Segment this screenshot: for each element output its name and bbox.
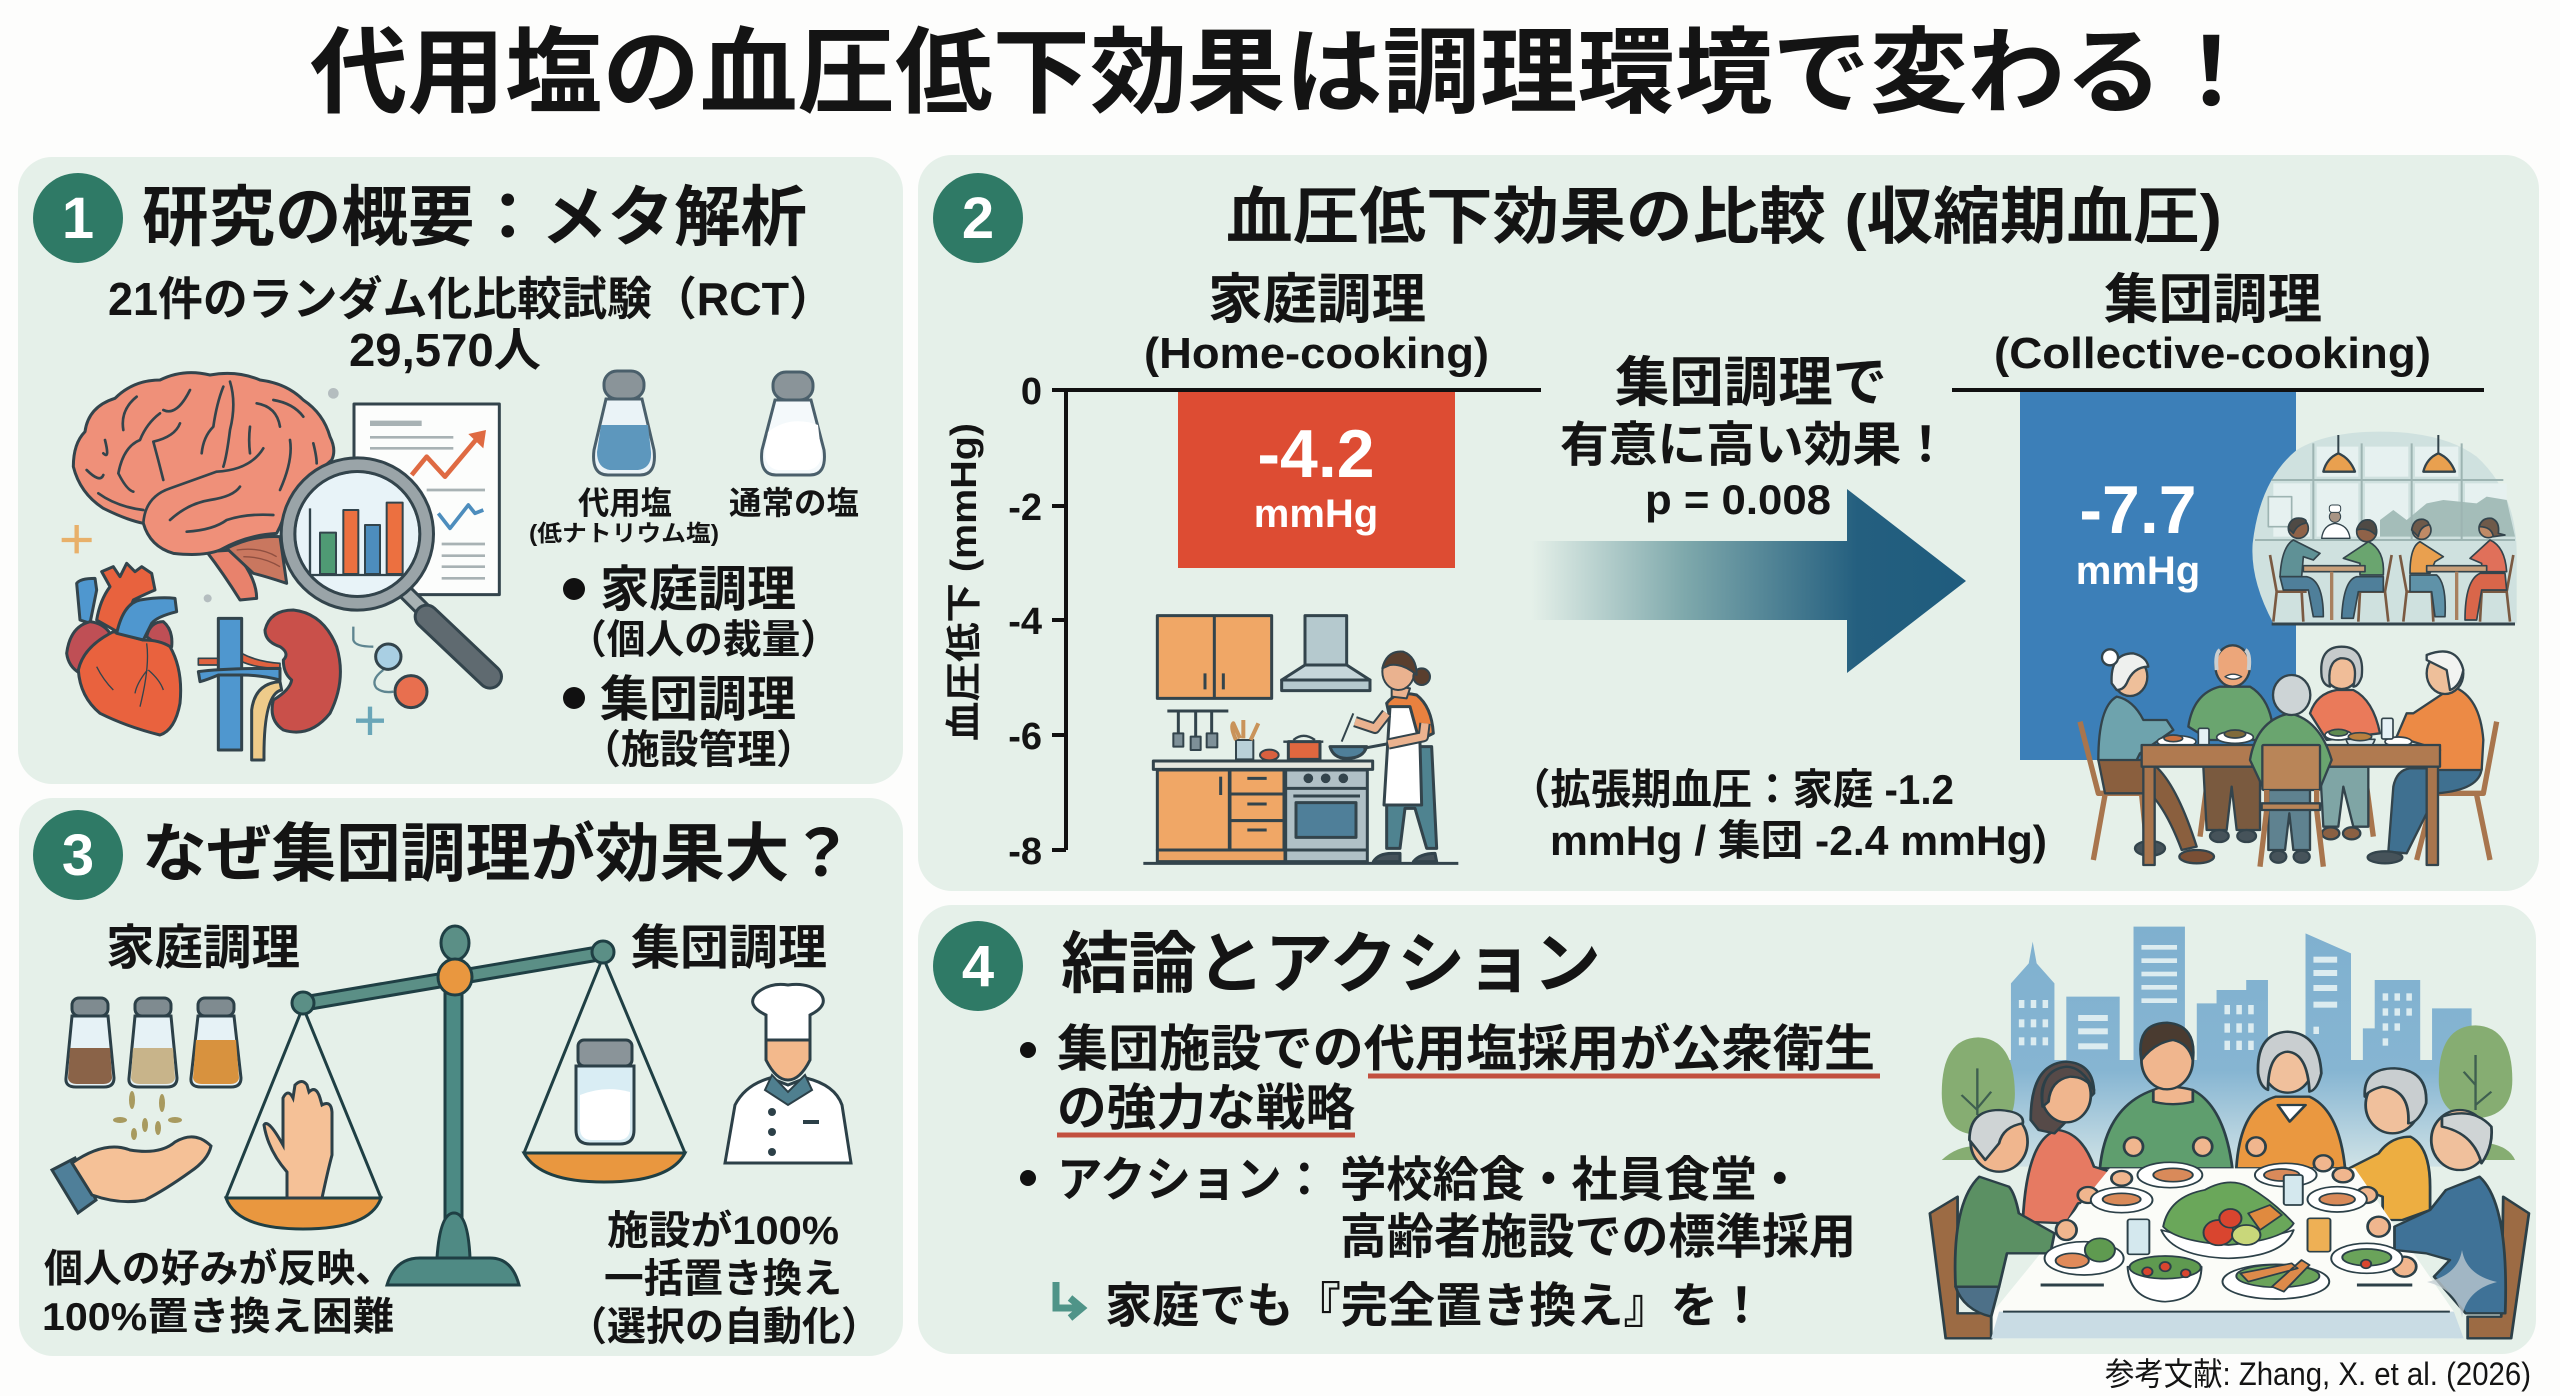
y axis title: 血圧低下 (mmHg)	[943, 423, 984, 741]
watermark sparkle	[2427, 1250, 2497, 1318]
heading 1: 研究の概要：メタ解析	[142, 180, 807, 254]
diners	[1930, 1023, 2529, 1338]
collective cooking header: (Collective-cooking)	[1994, 329, 2431, 378]
icon: heart	[67, 563, 181, 735]
left caption: 100%置き換え困難	[42, 1296, 394, 1339]
illustration: elderly group meal	[2080, 645, 2497, 867]
icon: open hand with seeds	[52, 1091, 211, 1213]
diastolic note: mmHg / 集団 -2.4 mmHg)	[1550, 817, 2047, 864]
icon: kidney and vessels	[198, 610, 340, 760]
icon: raised hand	[264, 1082, 332, 1198]
salt labels: (低ナトリウム塩)	[529, 520, 719, 546]
heading 2: 血圧低下効果の比較 (収縮期血圧)	[1226, 183, 2222, 252]
bar: collective cooking: mmHg	[2076, 549, 2200, 593]
conclusion bullet: 集団施設での代用塩採用が公衆衛生	[1057, 1021, 1875, 1077]
right caption: （選択の自動化）	[568, 1305, 880, 1349]
bar: collective cooking	[2020, 392, 2296, 760]
source citation: 参考文献: Zhang, X. et al. (2026)	[2105, 1356, 2531, 1392]
bullet list: cooking settings: （施設管理）	[582, 728, 815, 772]
left caption	[42, 1248, 394, 1339]
home cooking label: 家庭調理	[106, 922, 300, 975]
bar: home cooking	[1178, 392, 1455, 568]
study size text: 29,570人	[349, 324, 541, 376]
callout: significance: p = 0.008	[1645, 476, 1831, 523]
icon: three spice shakers	[66, 998, 241, 1087]
home cooking header: (Home-cooking)	[1144, 329, 1489, 378]
number badge 1: 1	[62, 186, 94, 251]
y axis: -2	[1008, 487, 1042, 529]
action bullet: 学校給食・社員食堂・	[1340, 1154, 1803, 1207]
y axis	[1008, 371, 1541, 873]
left caption: 個人の好みが反映、	[44, 1248, 394, 1291]
bar: home cooking: -4.2	[1257, 416, 1375, 492]
y axis: -6	[1008, 716, 1042, 758]
diastolic note: （拡張期血圧：家庭 -1.2	[1510, 766, 1954, 813]
title: 代用塩の血圧低下効果は調理環境で変わる！	[310, 20, 2260, 125]
icon: salt jar on pan	[576, 1040, 634, 1144]
home replacement text: 家庭でも『完全置き換え』を！	[1105, 1280, 1765, 1333]
trees	[1942, 1025, 2515, 1160]
arrow	[1531, 489, 1966, 673]
collective cooking label: 集団調理	[631, 922, 827, 975]
right caption: 一括置き換え	[604, 1257, 842, 1301]
illustration: organs and data	[62, 373, 499, 760]
city skyline	[2003, 927, 2472, 1167]
action bullet: アクション：	[1057, 1154, 1327, 1207]
right caption: 施設が100%	[607, 1209, 839, 1253]
icon: magnifying glass with bars	[288, 465, 490, 677]
number badge 4: 4	[962, 934, 994, 999]
y axis: -4	[1008, 601, 1042, 643]
right caption	[568, 1209, 880, 1349]
callout: significance: 集団調理で	[1615, 353, 1887, 413]
icon: document with chart	[354, 404, 499, 595]
callout: significance: 有意に高い効果！	[1560, 419, 1950, 472]
study size text	[108, 273, 834, 376]
icon: molecule and plus decorations	[62, 388, 427, 735]
y axis: -8	[1008, 831, 1042, 873]
action bullet: 高齢者施設での標準採用	[1340, 1211, 1856, 1264]
number badge 3: 3	[62, 823, 94, 888]
number badge 3	[33, 810, 123, 900]
callout: significance	[1560, 353, 1950, 523]
table food	[2041, 1162, 2412, 1302]
bar: home cooking: mmHg	[1254, 492, 1378, 536]
bullet list: cooking settings: 集団調理	[600, 673, 796, 727]
icon: brain	[73, 373, 334, 600]
panel 4: conclusion and action	[918, 905, 2536, 1354]
panel 3: why collective cooking	[19, 798, 903, 1356]
underline	[1057, 1076, 1880, 1135]
bullet list: cooking settings	[563, 563, 839, 772]
bar: collective cooking: -7.7	[2079, 472, 2197, 548]
number badge 2: 2	[962, 186, 994, 251]
panel 1: study overview	[18, 157, 903, 784]
home cooking header: 家庭調理	[1208, 270, 1426, 330]
icon: substitute salt shaker	[594, 371, 654, 475]
diastolic note	[1510, 766, 2047, 864]
panel 2: blood pressure comparison	[918, 155, 2539, 891]
collective cooking header	[1994, 270, 2431, 378]
salt labels: 通常の塩	[729, 485, 859, 521]
heading 3: なぜ集団調理が効果大？	[142, 818, 854, 890]
bullet list: cooking settings: 家庭調理	[600, 563, 796, 617]
number badge 1	[33, 173, 123, 263]
icon: chef	[725, 984, 851, 1163]
collective cooking header: 集団調理	[2104, 270, 2322, 330]
conclusion bullet	[1020, 1021, 1875, 1136]
y axis: 0	[1021, 371, 1042, 413]
home cooking header	[1144, 270, 1489, 378]
illustration: cafeteria	[2252, 432, 2517, 624]
action bullet	[1020, 1154, 1856, 1264]
conclusion bullet: の強力な戦略	[1057, 1080, 1355, 1136]
icon: return arrow	[1056, 1282, 1082, 1318]
baseline right	[1952, 388, 2484, 392]
illustration: home kitchen	[1143, 616, 1458, 863]
illustration: community dinner	[1930, 927, 2529, 1338]
bullet list: cooking settings: （個人の裁量）	[568, 618, 839, 662]
icon: balance scale	[226, 926, 685, 1285]
number badge 2	[933, 173, 1023, 263]
heading 4: 結論とアクション	[1061, 927, 1601, 1002]
salt labels: 代用塩	[578, 485, 672, 521]
icon: regular salt shaker	[762, 372, 824, 475]
study size text: 21件のランダム化比較試験（RCT）	[108, 273, 834, 325]
number badge 4	[933, 921, 1023, 1011]
salt labels	[529, 485, 859, 546]
